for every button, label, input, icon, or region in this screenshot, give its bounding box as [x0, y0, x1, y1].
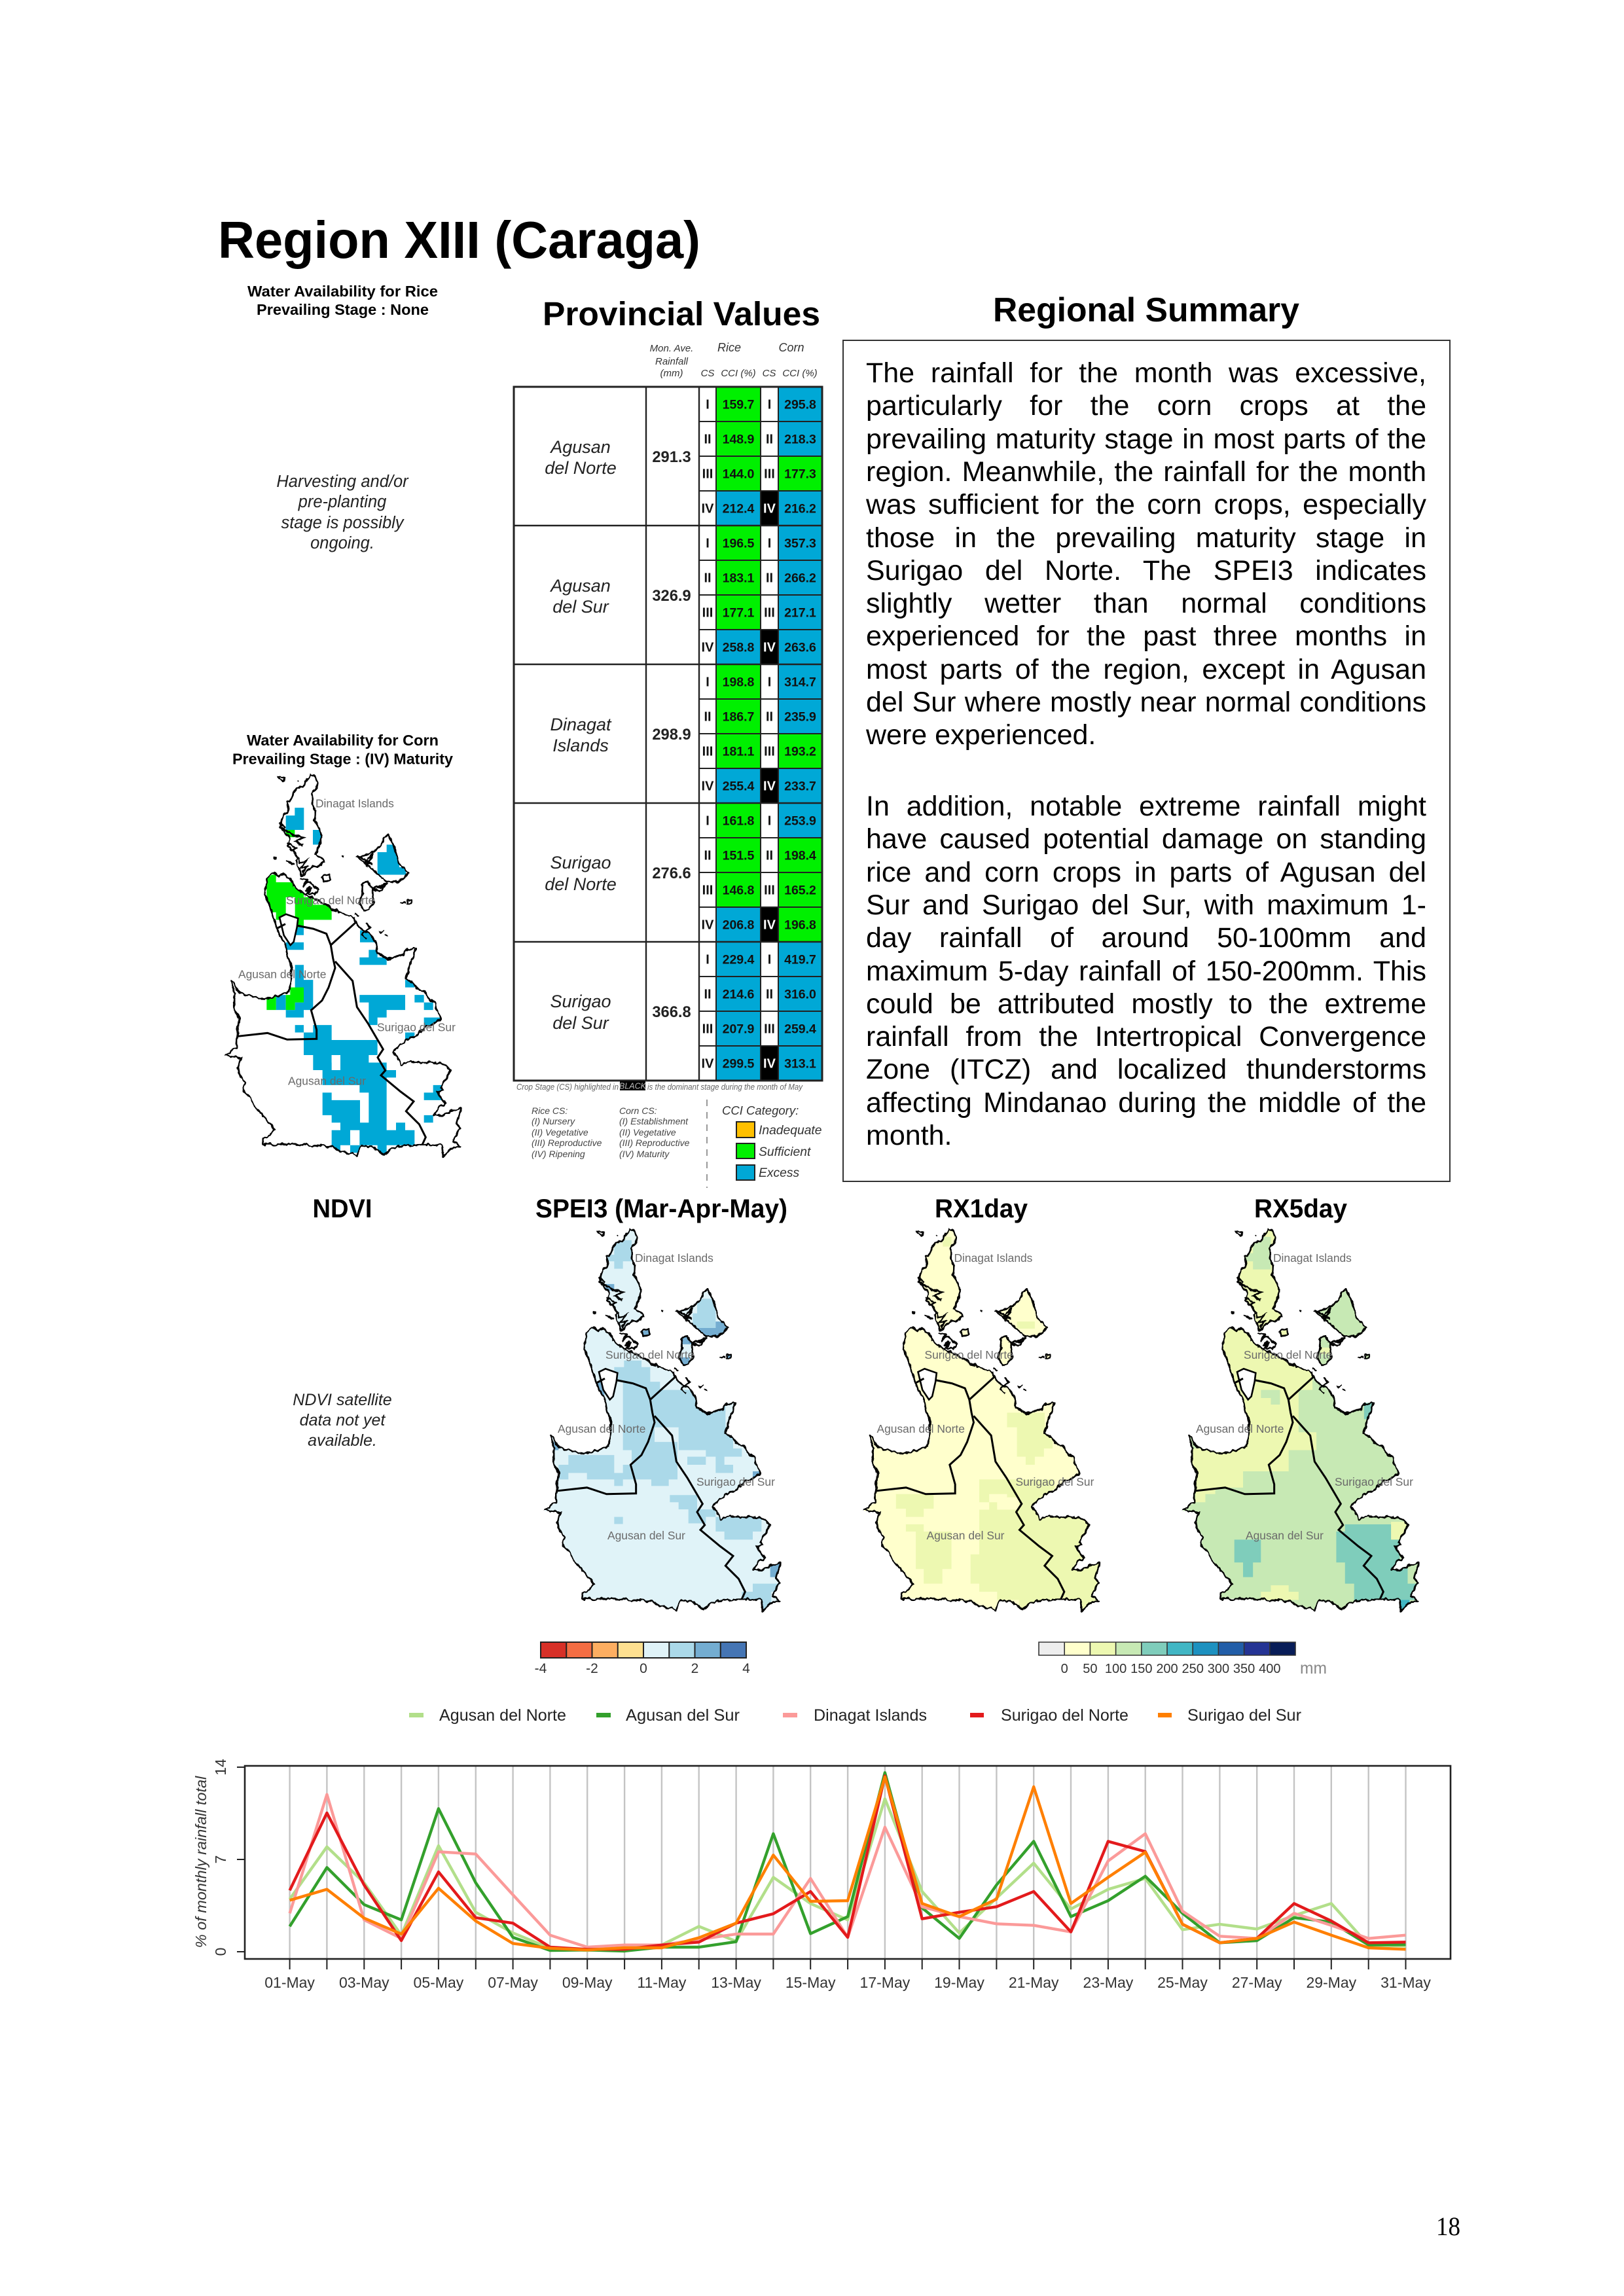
row group: Agusan del Norte: 144.0: [723, 467, 755, 482]
row group: Agusan del Norte: IV: [763, 501, 776, 516]
text block: regional summary: del Sur where mostly near normal conditions: [866, 687, 1426, 718]
row group: Agusan del Norte: 295.8: [784, 398, 816, 412]
x axis labels: 25-May: [1157, 1974, 1208, 1991]
row group: Surigao del Norte: Surigao: [550, 853, 611, 872]
row group: Dinagat Islands: [550, 664, 822, 803]
heading: regional summary: Regional Summary: [993, 291, 1299, 329]
row group: Surigao del Norte: IV: [702, 918, 714, 932]
row group: Agusan del Norte: I: [768, 398, 771, 412]
row group: Dinagat Islands: 198.8: [723, 675, 755, 690]
text: NDVI note: [293, 1391, 392, 1450]
row group: Dinagat Islands: 298.9: [652, 726, 691, 744]
row group: Surigao del Norte: 253.9: [784, 814, 816, 829]
map: SPEI3: Agusan del Norte: [558, 1422, 645, 1435]
colour bar: SPEI3: [535, 1642, 750, 1676]
legend: rice crop stages: (II) Vegetative: [532, 1127, 588, 1138]
map: RX5day: Surigao del Norte: [1244, 1348, 1332, 1361]
table header: (mm): [660, 368, 683, 379]
text: rice stage note: Harvesting and/or: [276, 473, 409, 491]
series: Surigao del Norte: [290, 1776, 1406, 1949]
text: rice stage note: ongoing.: [310, 534, 374, 552]
x axis labels: 01-May: [264, 1974, 315, 1991]
row group: Surigao del Norte: II: [704, 848, 712, 863]
legend: rice crop stages: (IV) Ripening: [532, 1149, 585, 1159]
legend: CCI category: Inadequate: [759, 1124, 822, 1138]
row group: Dinagat Islands: IV: [763, 779, 776, 793]
legend: corn crop stages: Corn CS:: [619, 1105, 657, 1116]
row group: Surigao del Sur: 313.1: [784, 1056, 816, 1071]
legend: corn crop stages: (III) Reproductive: [619, 1138, 690, 1148]
row group: Agusan del Sur: I: [768, 537, 771, 551]
text block: regional summary: In addition, notable extreme rainfall might: [866, 791, 1426, 822]
row group: Surigao del Sur: 207.9: [723, 1022, 755, 1037]
series: Agusan del Sur: [290, 1772, 1406, 1951]
row group: Agusan del Sur: II: [704, 571, 712, 585]
colour bar: rainfall mm: 400: [1259, 1662, 1280, 1676]
row group: Surigao del Norte: 146.8: [723, 884, 755, 898]
heading: NDVI: NDVI: [313, 1194, 372, 1223]
map: corn water availability: Surigao del Sur: [377, 1021, 456, 1034]
row group: Surigao del Norte: 165.2: [784, 884, 816, 898]
row group: Agusan del Norte: 216.2: [784, 501, 816, 516]
x axis labels: 05-May: [414, 1974, 464, 1991]
row group: Dinagat Islands: III: [764, 745, 775, 759]
text block: regional summary: day rainfall of around 50-100mm and: [866, 922, 1426, 954]
heading: SPEI3: SPEI3 (Mar-Apr-May): [535, 1194, 787, 1223]
map: SPEI3: [545, 1229, 781, 1611]
row group: Agusan del Sur: 177.1: [723, 606, 755, 620]
row group: Dinagat Islands: 235.9: [784, 709, 816, 724]
legend: CCI category: CCI Category:: [722, 1103, 799, 1117]
text: NDVI note: available.: [308, 1431, 377, 1450]
row group: Surigao del Norte: III: [764, 884, 775, 898]
colour bar: SPEI3: 4: [742, 1661, 750, 1676]
colour bar: rainfall mm: 300: [1208, 1662, 1229, 1676]
row group: Surigao del Sur: 214.6: [723, 987, 755, 1001]
chart legend: Agusan del Norte: [439, 1706, 566, 1725]
colour bar: SPEI3: 0: [640, 1661, 647, 1676]
page number: 18: [1436, 2212, 1460, 2241]
x axis labels: 09-May: [562, 1974, 613, 1991]
row group: Agusan del Norte: 291.3: [652, 449, 691, 466]
heading: RX1day: RX1day: [935, 1194, 1028, 1223]
row group: Surigao del Sur: I: [768, 953, 771, 967]
row group: Surigao del Norte: 198.4: [784, 848, 816, 863]
text block: regional summary: those in the prevailing maturity stage in: [866, 522, 1426, 554]
row group: Surigao del Norte: 161.8: [723, 814, 755, 829]
text block: regional summary: rainfall from the Intertropical Convergence: [866, 1021, 1426, 1052]
row group: Surigao del Sur: III: [764, 1022, 775, 1037]
row group: Surigao del Sur: 259.4: [784, 1022, 816, 1037]
colour bar: rainfall mm: 350: [1233, 1662, 1255, 1676]
table header: Rice: [717, 341, 741, 354]
row group: Agusan del Norte: I: [706, 398, 710, 412]
chart legend: Agusan del Sur: [626, 1706, 740, 1725]
chart legend: Surigao del Sur: [1187, 1706, 1301, 1725]
text block: regional summary: affecting Mindanao during the middle of the: [866, 1087, 1426, 1119]
heading: water availability for rice: [247, 283, 438, 318]
heading: water availability for corn: [232, 732, 453, 767]
map: RX5day: Agusan del Sur: [1246, 1529, 1324, 1542]
x axis labels: 17-May: [860, 1974, 911, 1991]
colour bar: rainfall mm: mm: [1300, 1659, 1327, 1677]
row group: Agusan del Norte: del Norte: [545, 458, 617, 478]
row group: Surigao del Norte: 196.8: [784, 918, 816, 932]
text block: regional summary: Sur and Surigao del Sur, with maximum 1-: [866, 889, 1426, 921]
row group: Surigao del Sur: II: [766, 987, 773, 1001]
map: RX1day: [863, 1229, 1100, 1615]
row group: Agusan del Sur: 263.6: [784, 640, 816, 655]
row group: Agusan del Sur: 357.3: [784, 537, 816, 551]
row group: Agusan del Sur: 196.5: [723, 537, 755, 551]
table footnote: [516, 1081, 803, 1092]
map: RX1day: Surigao del Norte: [924, 1348, 1013, 1361]
row group: Surigao del Sur: Surigao: [550, 992, 611, 1011]
row group: Surigao del Sur: 229.4: [723, 953, 755, 967]
row group: Surigao del Norte: III: [702, 884, 713, 898]
row group: Dinagat Islands: II: [704, 709, 712, 724]
legend: CCI category: Sufficient: [759, 1145, 812, 1159]
row group: Surigao del Norte: [545, 803, 822, 942]
text block: regional summary: was sufficient for the corn crops, especially: [866, 489, 1426, 520]
map: SPEI3: Agusan del Sur: [607, 1529, 685, 1542]
map: corn water availability: Agusan del Sur: [288, 1075, 366, 1088]
colour bar: SPEI3: 2: [691, 1661, 698, 1676]
row group: Surigao del Sur: 366.8: [652, 1004, 691, 1021]
text block: regional summary: have caused potential damage on standing: [866, 823, 1426, 855]
row group: Surigao del Norte: IV: [763, 918, 776, 932]
table header: CCI (%): [721, 368, 756, 379]
table footnote: is the dominant stage during the month of May: [647, 1082, 803, 1092]
row group: Dinagat Islands: III: [702, 745, 713, 759]
row group: Agusan del Sur: III: [702, 606, 713, 620]
row group: Dinagat Islands: IV: [702, 779, 714, 793]
row group: Dinagat Islands: 181.1: [723, 745, 755, 759]
table header: CS: [763, 368, 776, 379]
row group: Agusan del Sur: III: [764, 606, 775, 620]
row group: Agusan del Sur: 183.1: [723, 571, 755, 585]
chart legend: Surigao del Norte: [1001, 1706, 1128, 1725]
series: Surigao del Sur: [290, 1777, 1406, 1950]
text block: regional summary: maximum 5-day rainfall of 150-200mm. This: [866, 956, 1426, 987]
map: RX1day: Agusan del Sur: [927, 1529, 1005, 1542]
row group: Agusan del Sur: 326.9: [652, 588, 691, 605]
row group: Agusan del Norte: II: [766, 432, 773, 446]
text block: regional summary: region. Meanwhile, the rainfall for the month: [866, 456, 1426, 488]
x axis labels: 13-May: [711, 1974, 761, 1991]
row group: Surigao del Norte: 206.8: [723, 918, 755, 932]
row group: Dinagat Islands: II: [766, 709, 773, 724]
series: Agusan del Norte: [290, 1799, 1406, 1950]
legend: rice crop stages: (I) Nursery: [532, 1116, 575, 1126]
row group: Agusan del Norte: II: [704, 432, 712, 446]
colour bar: rainfall mm: 150: [1130, 1662, 1152, 1676]
y axis labels: [192, 1759, 229, 1956]
row group: Agusan del Norte: [545, 387, 822, 526]
row group: Dinagat Islands: I: [706, 675, 710, 690]
row group: Agusan del Norte: 159.7: [723, 398, 754, 412]
row group: Agusan del Sur: 266.2: [784, 571, 816, 585]
text block: regional summary: prevailing maturity stage in most parts of the: [866, 423, 1426, 455]
series: Dinagat Islands: [290, 1795, 1406, 1947]
colour bar: rainfall mm: 200: [1156, 1662, 1178, 1676]
text block: regional summary: The rainfall for the month was excessive,: [866, 357, 1426, 389]
map: corn water availability: [225, 774, 461, 1157]
row group: Agusan del Norte: 212.4: [723, 501, 755, 516]
row group: Agusan del Norte: III: [702, 467, 713, 482]
row group: Surigao del Norte: 276.6: [652, 865, 691, 882]
map: RX5day: Dinagat Islands: [1273, 1251, 1352, 1265]
chart legend: [409, 1706, 1301, 1725]
row group: Surigao del Sur: [550, 942, 822, 1081]
text: rice stage note: pre-planting: [298, 493, 386, 511]
row group: Surigao del Sur: 299.5: [723, 1056, 755, 1071]
row group: Surigao del Sur: IV: [702, 1056, 714, 1071]
legend: rice crop stages: (III) Reproductive: [532, 1138, 602, 1148]
row group: Agusan del Sur: del Sur: [552, 597, 609, 617]
map: RX1day: Dinagat Islands: [954, 1251, 1033, 1265]
row group: Agusan del Sur: IV: [763, 640, 776, 655]
row group: Surigao del Sur: 316.0: [784, 987, 816, 1001]
row group: Agusan del Norte: 177.3: [784, 467, 816, 482]
table header: CS: [701, 368, 714, 379]
x axis labels: 23-May: [1083, 1974, 1134, 1991]
map: RX1day: Agusan del Norte: [877, 1422, 965, 1435]
heading: water availability for rice: Prevailing Stage : None: [257, 301, 429, 318]
map: RX5day: Surigao del Sur: [1335, 1475, 1413, 1488]
table footnote: Crop Stage (CS) highlighted in: [516, 1082, 619, 1092]
map: SPEI3: Dinagat Islands: [635, 1251, 713, 1265]
row group: Surigao del Norte: I: [768, 814, 771, 829]
x axis labels: 29-May: [1306, 1974, 1357, 1991]
chart legend: Dinagat Islands: [814, 1706, 927, 1725]
heading: water availability for corn: Water Availability for Corn: [247, 732, 439, 749]
row group: Dinagat Islands: 186.7: [723, 709, 754, 724]
legend: corn crop stages: (II) Vegetative: [619, 1127, 676, 1138]
table header: Rainfall: [655, 356, 689, 367]
text block: regional summary: Surigao del Norte. The SPEI3 indicates: [866, 555, 1426, 586]
text block: regional summary: slightly wetter than normal conditions: [866, 588, 1426, 619]
text block: regional summary: were experienced.: [866, 719, 1096, 751]
heading: RX5day: RX5day: [1254, 1194, 1348, 1223]
row group: Agusan del Sur: Agusan: [549, 576, 611, 596]
text block: regional summary: month.: [866, 1120, 952, 1151]
legend: corn crop stages: (I) Establishment: [619, 1116, 689, 1126]
row group: Dinagat Islands: 233.7: [784, 779, 816, 793]
text: NDVI note: NDVI satellite: [293, 1391, 392, 1409]
row group: Agusan del Sur: I: [706, 537, 710, 551]
row group: Dinagat Islands: Dinagat: [550, 715, 612, 734]
panel: regional summary: [842, 340, 1451, 1182]
map: RX5day: Agusan del Norte: [1196, 1422, 1284, 1435]
title: Region XIII (Caraga): [218, 211, 700, 269]
legend: CCI category: [722, 1103, 822, 1180]
colour bar: rainfall mm: [1039, 1642, 1327, 1677]
row group: Surigao del Sur: 419.7: [784, 953, 816, 967]
row group: Surigao del Norte: I: [706, 814, 710, 829]
text block: regional summary: rice and corn crops in parts of Agusan del: [866, 857, 1426, 888]
row group: Dinagat Islands: 255.4: [723, 779, 755, 793]
x axis labels: 31-May: [1380, 1974, 1431, 1991]
text block: regional summary: experienced for the past three months in: [866, 620, 1426, 652]
colour bar: SPEI3: -4: [535, 1661, 547, 1676]
table header: Corn: [778, 341, 804, 354]
map: corn water availability: Dinagat Islands: [316, 797, 394, 810]
map: RX1day: Surigao del Sur: [1016, 1475, 1094, 1488]
row group: Agusan del Sur: II: [766, 571, 773, 585]
line chart: daily rainfall share: [192, 1759, 1451, 1991]
table header: CCI (%): [782, 368, 818, 379]
text block: regional summary: most parts of the region, except in Agusan: [866, 654, 1426, 685]
colour bar: rainfall mm: 250: [1182, 1662, 1204, 1676]
colour bar: SPEI3: -2: [586, 1661, 598, 1676]
text: rice stage note: stage is possibly: [281, 514, 405, 532]
row group: Agusan del Norte: 218.3: [784, 432, 816, 446]
row group: Agusan del Norte: Agusan: [549, 437, 611, 457]
y axis labels: % of monthly rainfall total: [192, 1776, 209, 1948]
row group: Agusan del Norte: 148.9: [723, 432, 755, 446]
row group: Agusan del Norte: IV: [702, 501, 714, 516]
legend: rice crop stages: [532, 1105, 602, 1159]
table footnote: BLACK: [619, 1081, 647, 1090]
x axis labels: 03-May: [339, 1974, 389, 1991]
row group: Dinagat Islands: Islands: [552, 736, 609, 755]
table header: Mon. Ave.: [650, 343, 693, 354]
legend: corn crop stages: (IV) Maturity: [619, 1149, 670, 1159]
text block: regional summary: particularly for the corn crops at the: [866, 390, 1426, 422]
row group: Dinagat Islands: 314.7: [784, 675, 816, 690]
row group: Dinagat Islands: 193.2: [784, 745, 816, 759]
row group: Agusan del Sur: [549, 526, 822, 664]
row group: Surigao del Sur: II: [704, 987, 712, 1001]
colour bar: rainfall mm: 0: [1061, 1662, 1068, 1676]
row group: Agusan del Sur: 258.8: [723, 640, 755, 655]
table: provincial values: [513, 387, 822, 1081]
x axis labels: [264, 1974, 1431, 1991]
text: rice stage note: [276, 473, 409, 552]
map: SPEI3: Surigao del Sur: [696, 1475, 775, 1488]
y axis labels: 0: [212, 1948, 229, 1956]
x axis labels: 27-May: [1232, 1974, 1282, 1991]
row group: Surigao del Sur: IV: [763, 1056, 776, 1071]
x axis labels: 07-May: [488, 1974, 538, 1991]
row group: Surigao del Norte: del Norte: [545, 874, 617, 894]
row group: Agusan del Sur: 217.1: [784, 606, 816, 620]
x axis labels: 11-May: [637, 1974, 687, 1991]
legend: CCI category: Excess: [759, 1166, 800, 1180]
x axis labels: 19-May: [934, 1974, 984, 1991]
text block: regional summary: could be attributed mostly to the extreme: [866, 988, 1426, 1020]
row group: Surigao del Norte: 151.5: [723, 848, 755, 863]
colour bar: rainfall mm: 100: [1105, 1662, 1127, 1676]
map: RX5day: [1183, 1224, 1419, 1611]
row group: Dinagat Islands: I: [768, 675, 771, 690]
legend: corn crop stages: [619, 1105, 690, 1159]
row group: Surigao del Sur: I: [706, 953, 710, 967]
y axis labels: 7: [212, 1856, 229, 1863]
x axis labels: 15-May: [785, 1974, 836, 1991]
map: corn water availability: Agusan del Norte: [238, 967, 326, 980]
heading: provincial values: Provincial Values: [543, 295, 820, 332]
text: NDVI note: data not yet: [300, 1411, 386, 1429]
row group: Agusan del Norte: III: [764, 467, 775, 482]
colour bar: rainfall mm: 50: [1083, 1662, 1098, 1676]
row group: Surigao del Norte: II: [766, 848, 773, 863]
row group: Surigao del Sur: del Sur: [552, 1013, 609, 1033]
map: SPEI3: Surigao del Norte: [605, 1348, 694, 1361]
heading: water availability for corn: Prevailing Stage : (IV) Maturity: [232, 750, 453, 767]
heading: water availability for rice: Water Availability for Rice: [247, 283, 438, 300]
text block: regional summary: Zone (ITCZ) and localized thunderstorms: [866, 1054, 1426, 1085]
x axis labels: 21-May: [1009, 1974, 1059, 1991]
row group: Agusan del Sur: IV: [702, 640, 714, 655]
y axis labels: 14: [212, 1759, 229, 1776]
legend: rice crop stages: Rice CS:: [532, 1105, 568, 1116]
map: corn water availability: Surigao del Norte: [286, 894, 374, 907]
table header: [650, 341, 818, 379]
row group: Surigao del Sur: III: [702, 1022, 713, 1037]
